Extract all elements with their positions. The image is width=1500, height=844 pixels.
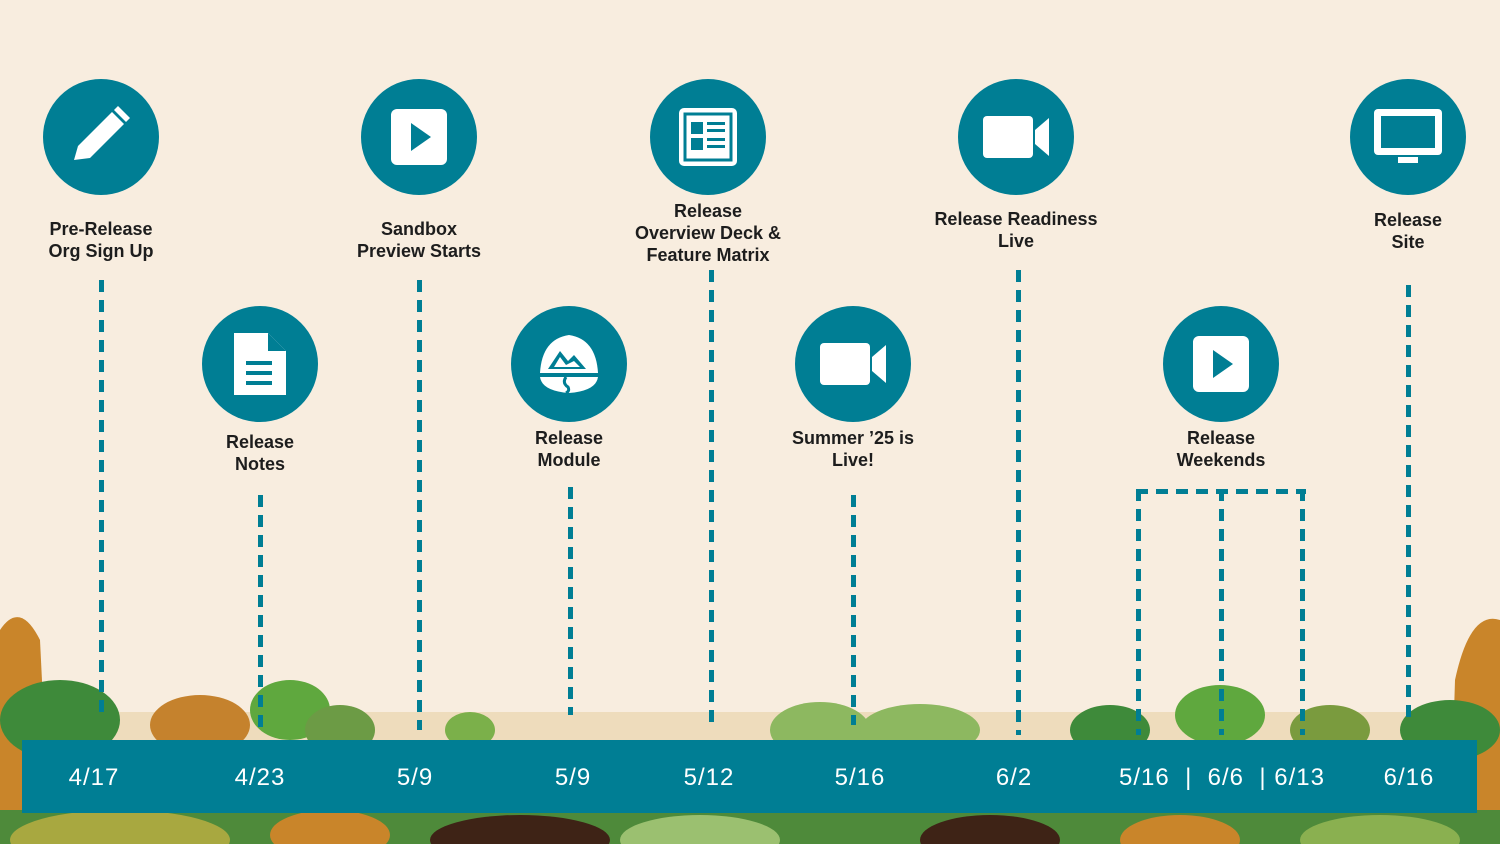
text: 4/23 xyxy=(235,764,285,791)
text: 5/16 | 6/6 | 6/13 xyxy=(1119,764,1325,791)
label: overview deck xyxy=(635,201,781,265)
label: release weekends xyxy=(1176,428,1265,470)
label: pre-release xyxy=(48,219,154,261)
label: release site: Site xyxy=(1391,232,1424,252)
icon: play xyxy=(361,79,477,195)
icon: play weekends xyxy=(1163,306,1279,422)
label: readiness live: Release Readiness xyxy=(934,209,1098,229)
label: summer live: Summer ’25 is xyxy=(792,428,914,448)
label: pre-release: Pre-Release xyxy=(49,219,153,239)
icon: pencil xyxy=(43,79,159,195)
label: release weekends: Release xyxy=(1187,428,1255,448)
label: release module xyxy=(535,428,603,470)
label: release module: Release xyxy=(535,428,603,448)
icon: monitor xyxy=(1350,79,1466,195)
text: 6/2 xyxy=(996,764,1032,791)
icon: video live xyxy=(795,306,911,422)
label: release notes: Notes xyxy=(235,454,285,474)
label: release module: Module xyxy=(538,450,600,470)
label: overview deck: Overview Deck & xyxy=(635,223,781,243)
text: 5/9 xyxy=(397,764,433,791)
text: 6/16 xyxy=(1384,764,1434,791)
text: 5/9 xyxy=(555,764,591,791)
label: release site: Release xyxy=(1374,210,1442,230)
label: release site xyxy=(1374,210,1442,252)
dashed connectors xyxy=(99,270,1411,735)
label: pre-release: Org Sign Up xyxy=(48,241,154,261)
text: 5/16 xyxy=(835,764,885,791)
label: readiness live: Live xyxy=(998,231,1034,251)
label: sandbox: Preview Starts xyxy=(357,241,481,261)
label: overview deck: Release xyxy=(674,201,742,221)
dates xyxy=(69,764,1434,791)
label: summer live xyxy=(792,428,914,470)
date bar xyxy=(22,740,1477,813)
label: release weekends: Weekends xyxy=(1177,450,1265,470)
label: readiness live xyxy=(934,209,1098,251)
label: sandbox: Sandbox xyxy=(381,219,457,239)
label: summer live: Live! xyxy=(832,450,874,470)
label: overview deck: Feature Matrix xyxy=(646,245,770,265)
ground scenery xyxy=(0,617,1500,844)
label: release notes xyxy=(226,432,294,474)
label: sandbox xyxy=(357,219,481,261)
icon: trailhead module xyxy=(511,306,627,422)
text: 4/17 xyxy=(69,764,119,791)
label: release notes: Release xyxy=(226,432,294,452)
icon: document deck xyxy=(650,79,766,195)
icon: notes xyxy=(202,306,318,422)
text: 5/12 xyxy=(684,764,734,791)
icon: video xyxy=(958,79,1074,195)
